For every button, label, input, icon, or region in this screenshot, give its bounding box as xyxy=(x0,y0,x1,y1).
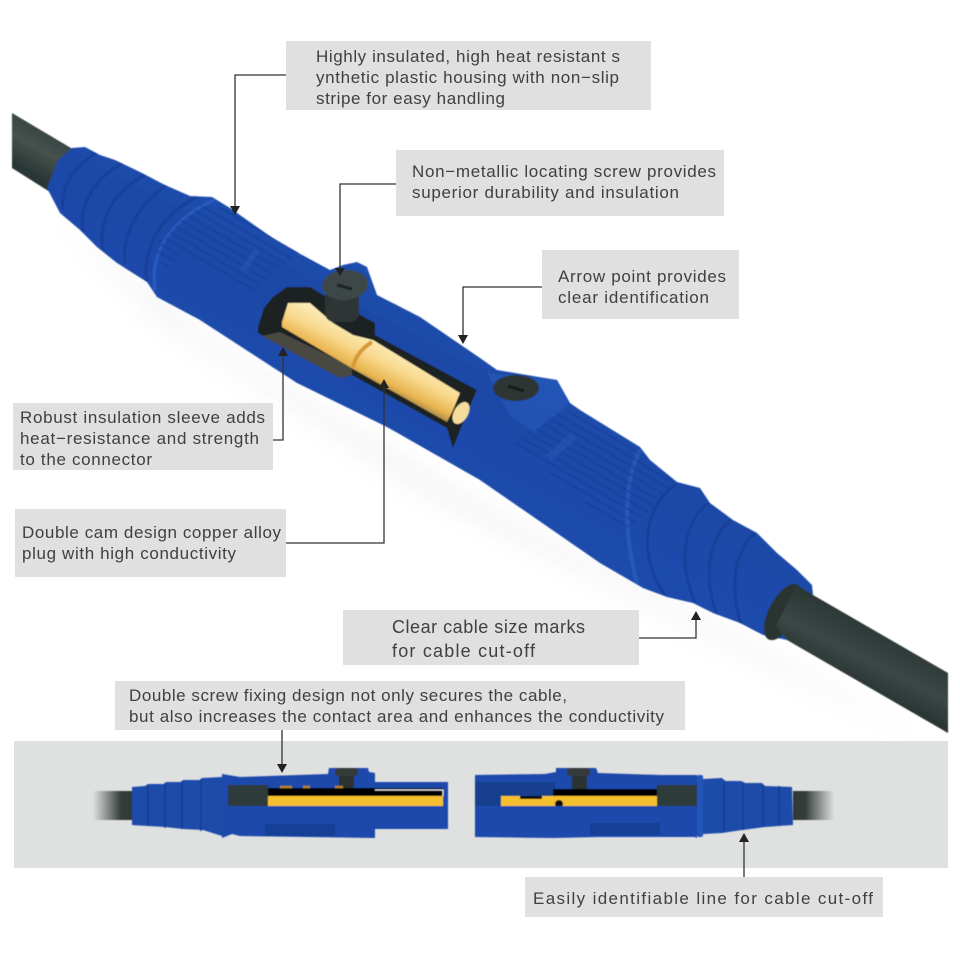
cavity xyxy=(475,782,555,806)
panel: cross sections xyxy=(14,741,948,868)
callout: insulation sleeve xyxy=(13,403,273,470)
arrow: double screw xyxy=(277,730,287,773)
callout: cut-off line xyxy=(525,877,883,917)
callout: copper plug: plug with high conductivity xyxy=(22,544,236,563)
arrow: cable size marks xyxy=(639,611,701,638)
callout: double screw: but also increases the contact area and enhances the conductivity xyxy=(129,707,664,726)
right section ribs xyxy=(703,778,793,834)
callout: arrow point xyxy=(542,250,739,319)
left section sleeve xyxy=(228,785,268,806)
callout: cable size marks xyxy=(343,610,639,665)
left cable xyxy=(12,113,76,192)
left cross section xyxy=(93,768,448,838)
right flange highlight xyxy=(627,450,640,584)
rib texture left grip xyxy=(158,206,299,291)
left flange highlight xyxy=(154,200,214,290)
gold contact xyxy=(282,303,460,422)
callout: insulation sleeve: to the connector xyxy=(20,450,152,469)
callout: insulation sleeve: heat−resistance and strength xyxy=(20,429,259,448)
arrow: arrow point xyxy=(458,287,542,344)
main connector illustration xyxy=(12,113,948,733)
callout: copper plug xyxy=(15,509,286,577)
arrow: copper plug xyxy=(286,379,389,543)
right section body xyxy=(475,768,697,838)
orange thread dots xyxy=(280,786,343,788)
callout: arrow point: clear identification xyxy=(558,288,709,307)
left section grip xyxy=(265,824,335,836)
arrow: locating screw xyxy=(335,184,396,276)
second screw boss xyxy=(487,373,570,432)
right black cavity xyxy=(553,789,657,797)
callout: cable size marks: for cable cut-off xyxy=(392,641,536,661)
blue housing xyxy=(47,147,813,640)
callout: housing: stripe for easy handling xyxy=(316,89,505,108)
contact collar xyxy=(353,342,372,367)
right cable xyxy=(756,578,948,733)
left section cable xyxy=(93,791,133,820)
callout: housing: Highly insulated, high heat resistant s xyxy=(316,47,620,66)
contact end xyxy=(449,399,473,427)
screw xyxy=(335,768,358,790)
locating screw 1 xyxy=(321,268,369,322)
housing surface detail xyxy=(63,152,755,624)
callout: housing xyxy=(286,41,651,110)
right section cable xyxy=(793,791,834,820)
callout: locating screw xyxy=(396,150,724,216)
callout: arrow point: Arrow point provides xyxy=(558,267,726,286)
soft shadow under connector xyxy=(60,215,920,735)
rib texture right grip xyxy=(514,412,668,528)
callout: insulation sleeve: Robust insulation sleeve adds xyxy=(20,408,265,427)
right screw xyxy=(567,768,590,790)
arrow: housing xyxy=(230,75,286,215)
right cross section xyxy=(475,768,834,838)
left strain relief ridges xyxy=(63,152,197,282)
left section body xyxy=(222,768,448,838)
locating screw 2 xyxy=(493,375,539,401)
right strain relief ridges xyxy=(647,484,755,624)
cutaway dark cavity xyxy=(258,287,477,448)
callout: double screw xyxy=(115,681,685,730)
callout: copper plug: Double cam design copper alloy xyxy=(22,523,282,542)
plug tip xyxy=(501,796,553,806)
yellow contact xyxy=(268,796,443,806)
arrow: insulation sleeve xyxy=(273,347,288,440)
arrow: cut-off line xyxy=(739,833,749,877)
callout: double screw: Double screw fixing design not only secures the cable, xyxy=(129,686,567,705)
callout: locating screw: Non−metallic locating screw provides xyxy=(412,162,716,181)
embossed marks xyxy=(240,248,260,273)
callout: cable size marks: Clear cable size marks xyxy=(392,617,585,637)
callout: locating screw: superior durability and insulation xyxy=(412,183,679,202)
callout: housing: ynthetic plastic housing with non−slip xyxy=(316,68,619,87)
black cavity xyxy=(268,788,443,796)
right sleeve xyxy=(657,785,697,806)
callout: cut-off line: Easily identifiable line for cable cut-off xyxy=(533,889,873,908)
cutaway lower sleeve xyxy=(262,332,352,378)
right yellow contact xyxy=(553,796,657,806)
left section ribs xyxy=(132,777,222,836)
